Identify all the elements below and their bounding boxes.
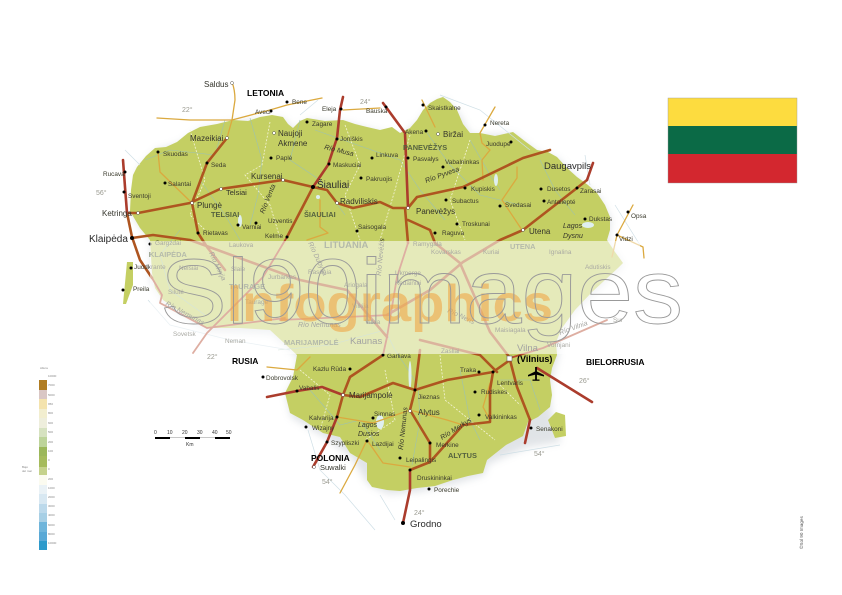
small towns: Simnas [374, 411, 395, 418]
altitude legend: 5000 [48, 393, 55, 397]
country labels: POLONIA [311, 453, 350, 463]
small towns: Maskuciai [333, 162, 361, 169]
small towns: Sovetsk [173, 331, 197, 338]
small towns: Kovarskas [431, 249, 461, 256]
medium towns [102, 80, 551, 472]
small towns: Joniškis [340, 136, 363, 143]
small towns: Gargzdai [155, 240, 181, 247]
altitude legend: 500 [48, 430, 53, 434]
small towns: Vabalis [299, 385, 320, 392]
copyright credit: ©Sol 90 Images [798, 516, 804, 549]
rivers and lakes labels: Río Merkys [439, 417, 473, 442]
small towns: Laukova [229, 242, 254, 249]
small towns: Slaie [231, 266, 246, 273]
rivers and lakes labels: Río Pyvesa [424, 166, 460, 185]
large cities: Daugavpils [544, 161, 591, 172]
small towns: Dukstas [589, 216, 612, 223]
graticule labels: 56° [96, 189, 107, 197]
large cities: Grodno [410, 519, 442, 530]
altitude legend: del mar [22, 469, 32, 473]
small towns: Rasenia [308, 269, 332, 276]
graticule labels: 22° [182, 106, 193, 114]
small towns: Zagare [312, 121, 333, 128]
small towns: Jurbarkas [268, 274, 296, 281]
town markers [122, 100, 630, 525]
graticule labels: 54° [322, 478, 333, 486]
altitude legend: 1000 [48, 486, 55, 490]
large cities: Klaipėda [89, 234, 128, 245]
rivers and lakes labels: Lagos [358, 422, 378, 429]
small towns: Tauragé [245, 299, 269, 306]
small towns: Subactus [452, 198, 479, 205]
altitude legend: 7000 [48, 383, 55, 387]
hollow town markers [136, 82, 524, 468]
rivers [125, 95, 640, 530]
small towns: Vabalninkas [445, 159, 479, 166]
altitude legend: 100 [48, 449, 53, 453]
small towns: Pasvalys [413, 156, 439, 163]
medium towns: Saldus [204, 80, 228, 89]
small towns: Kalvarija [309, 415, 334, 422]
small towns: Kuriai [483, 249, 499, 256]
small towns: Lentvaris [497, 380, 523, 387]
small towns: Salantai [168, 181, 191, 188]
rivers and lakes labels: Río Nemunas [398, 406, 410, 450]
altitude legend: 4000 [48, 513, 55, 517]
small towns: Adutiskis [585, 264, 611, 271]
small towns: Sventoji [128, 193, 151, 200]
watermark: orange word: Infographics [227, 275, 553, 333]
rivers and lakes labels: Lagos [563, 223, 583, 230]
rivers and lakes labels: Río Musa [324, 144, 354, 158]
graticule labels: 54° [534, 450, 545, 458]
medium towns: Mazeikiai [190, 134, 224, 143]
region labels: ALYTUS [448, 451, 477, 460]
small towns [103, 99, 647, 494]
scale bar: 0 [154, 430, 157, 436]
land shadow [131, 99, 624, 494]
region labels [149, 143, 536, 460]
small towns: Akena [405, 129, 424, 136]
altitude legend: 2000 [48, 495, 55, 499]
small towns: Troskunai [462, 221, 490, 228]
regional boundaries [190, 122, 520, 440]
small towns: Rudiskes [481, 389, 507, 396]
medium towns: Telsiai [226, 188, 247, 197]
medium towns: Utena [529, 227, 551, 236]
lakes [238, 174, 594, 429]
region labels: UTENA [510, 242, 536, 251]
altitude legend: 10000 [48, 541, 57, 545]
small towns: Neisiai [179, 265, 198, 272]
altitude legend: 6000 [48, 523, 55, 527]
small towns: Aveci [255, 109, 271, 116]
large cities [89, 161, 591, 530]
rivers and lakes labels [164, 144, 589, 450]
small towns: Varniai [242, 224, 261, 231]
large cities: Vilna [517, 343, 539, 354]
scale bar: 30 [197, 430, 203, 436]
small towns: Wizajny [312, 425, 335, 432]
graticule labels: 26° [579, 377, 590, 385]
small towns: Preila [133, 286, 150, 293]
altitude legend: 3000 [48, 504, 55, 508]
small towns: Juodkrante [134, 264, 166, 271]
graticule labels: 24° [360, 98, 371, 106]
small towns: Svedasai [505, 202, 531, 209]
small towns: Ignalina [549, 249, 572, 256]
medium towns: Panevėžys [416, 207, 455, 216]
small towns: Eleja [322, 106, 337, 113]
pale road extensions [152, 237, 607, 358]
small towns: Nereta [490, 120, 510, 127]
region labels: ŠIAULIAI [304, 210, 336, 219]
country labels [232, 88, 645, 463]
map labels [89, 80, 647, 530]
watermark band [150, 241, 640, 354]
small towns: Dobrovolsk [266, 375, 299, 382]
scale bar: 20 [182, 430, 188, 436]
small towns: Uzventis [268, 218, 293, 225]
small towns: Jieznas [418, 394, 440, 401]
altitude legend: 8000 [48, 532, 55, 536]
scale bar: 10 [167, 430, 173, 436]
altitude legend: 10000 [48, 374, 57, 378]
small towns: Ariogala [344, 282, 368, 289]
graticule labels [96, 98, 590, 517]
small towns: Ramygala [413, 241, 442, 248]
land: Curonian spit [123, 262, 133, 304]
altitude legend: 800 [48, 411, 53, 415]
small towns: Rucava [103, 171, 125, 178]
small towns: Dusetos [547, 186, 570, 193]
altitude legend: 0 [48, 467, 50, 471]
small towns: Silutė [168, 289, 184, 296]
small towns: Saisogala [358, 224, 387, 231]
region labels: KLAIPĖDA [149, 250, 187, 259]
small towns: Kedainiai [395, 280, 421, 287]
altitude legend [22, 366, 57, 550]
small towns: Seda [211, 162, 226, 169]
medium towns: Ketringa [102, 209, 132, 218]
rivers and lakes labels: Río Minija [207, 251, 227, 282]
small towns: Bene [292, 99, 307, 106]
small towns: Maisiagala [495, 327, 526, 334]
small towns: Kelme [265, 233, 284, 240]
land area [130, 97, 623, 491]
small towns: Vornjani [547, 342, 570, 349]
rivers and lakes labels: Río Dubysa [306, 241, 328, 277]
rivers and lakes labels: Río Nemunas [164, 301, 206, 327]
small towns: Kupiskis [471, 186, 495, 193]
small towns: Vidzi [619, 236, 633, 243]
altitude legend: 200 [48, 440, 53, 444]
medium towns: Kursenai [251, 172, 283, 181]
country labels: BIELORRUSIA [586, 357, 645, 367]
small towns: Szypliszki [331, 440, 359, 447]
medium towns: Alytus [418, 408, 440, 417]
rivers and lakes labels: Dusios [358, 431, 380, 438]
secondary roads [157, 82, 644, 493]
medium towns: Radviliskis [340, 197, 378, 206]
rivers and lakes labels: Río Nemunas [298, 322, 341, 329]
medium towns: Akmene [278, 139, 308, 148]
altitude legend: 200 [48, 477, 53, 481]
altitude legend: 0 [48, 458, 50, 462]
large cities: Šiauliai [317, 178, 349, 191]
small towns: Rietavas [203, 230, 228, 237]
scale bar [154, 430, 232, 448]
rivers and lakes labels: Río Venta [259, 183, 277, 215]
region labels: PANEVĖŽYS [403, 143, 447, 152]
medium towns: Biržai [443, 130, 463, 139]
medium towns: Plungė [197, 201, 222, 210]
scale bar: Km [186, 442, 194, 448]
small towns: Raguva [442, 230, 464, 237]
small towns: Opsa [631, 213, 647, 220]
small towns: Pakruojis [366, 176, 392, 183]
small towns: Linkuva [376, 152, 398, 159]
large cities: (Vilnius) [517, 354, 552, 364]
airport icon [528, 367, 544, 381]
small towns: Senakoni [536, 426, 563, 433]
small towns: Ukmerge [395, 270, 421, 277]
small towns: Garliava [387, 353, 411, 360]
watermark: outlined word: Sl90images [160, 241, 683, 343]
country labels: RUSIA [232, 356, 258, 366]
watermark text [160, 241, 683, 343]
altitude legend: Altura [40, 366, 48, 370]
small towns: Kazlu Rūda [313, 366, 346, 373]
scale bar: 40 [212, 430, 218, 436]
medium towns: Naujoji [278, 129, 303, 138]
region labels: TELSIAI [211, 210, 239, 219]
small towns: Druskininkai [417, 475, 452, 482]
altitude legend: Bajo [22, 465, 28, 469]
scale bar: 50 [226, 430, 232, 436]
rivers and lakes labels: Río Vilnia [558, 320, 589, 337]
rivers and lakes labels: Río Neris [446, 307, 476, 326]
main roads [127, 138, 587, 470]
small towns: Sur [613, 317, 624, 324]
region labels: TAURAGĖ [229, 282, 265, 291]
small towns: Vilkia [365, 319, 381, 326]
small towns: Lazdijai [372, 441, 394, 448]
small towns: Skaistkalne [428, 105, 461, 112]
graticule labels: 22° [207, 353, 218, 361]
flag of Lithuania [668, 98, 797, 183]
region labels: MARIJAMPOLĖ [284, 338, 339, 347]
small towns: Juodupe [486, 141, 511, 148]
small towns: Zasliai [441, 348, 459, 355]
small towns: Antaliepté [547, 199, 576, 206]
map of Lithuania [123, 82, 644, 530]
small towns: Paplė [276, 155, 293, 162]
small towns: Valkininkas [485, 414, 517, 421]
rivers and lakes labels: Dysnu [563, 233, 583, 240]
small towns: Bauska [366, 108, 388, 115]
altitude legend: 600 [48, 421, 53, 425]
small towns: Zarasai [580, 188, 601, 195]
small towns: Neman [225, 338, 246, 345]
large cities: Kaunas [350, 336, 382, 347]
small towns: Leipalingis [406, 457, 436, 464]
medium towns: Marijampolė [349, 391, 393, 400]
small towns: Vilkija [352, 303, 369, 310]
small towns: Skuodas [163, 151, 188, 158]
graticule labels: 24° [414, 509, 425, 517]
medium towns: Suwalki [320, 463, 346, 472]
red highways [123, 97, 593, 523]
land: Senakoni patch [548, 412, 566, 438]
region labels: LITUANIA [324, 240, 368, 251]
small towns: Merkine [436, 442, 459, 449]
altitude legend: 950 [48, 402, 53, 406]
small towns: Traka [460, 367, 477, 374]
country labels: LETONIA [247, 88, 284, 98]
rivers and lakes labels: Río Nevėžis [376, 237, 386, 276]
small towns: Porechie [434, 487, 460, 494]
